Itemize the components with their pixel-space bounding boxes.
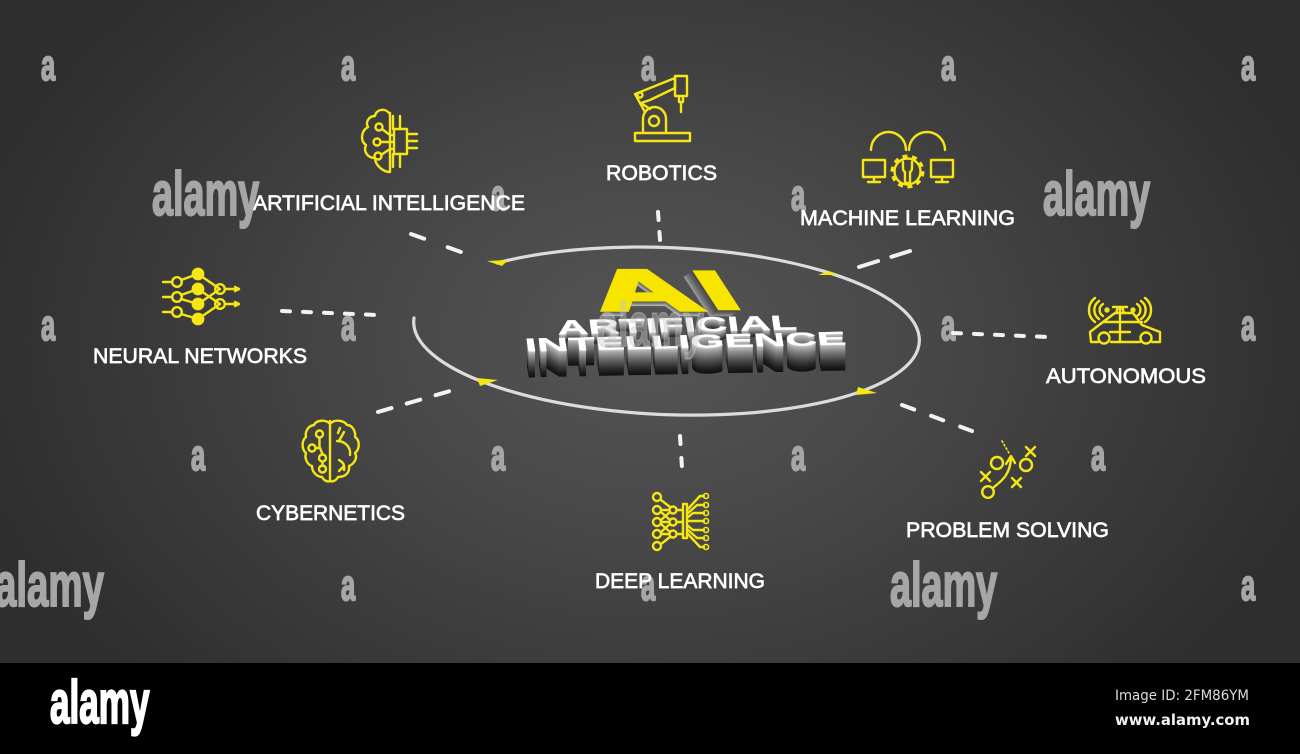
- watermarks: a: [941, 40, 956, 90]
- label: cybernetics: CYBERNETICS: [256, 502, 405, 525]
- watermarks: alamy: [1043, 159, 1151, 228]
- icon: brain chip: [362, 110, 417, 172]
- icon: robot arm: [635, 76, 690, 141]
- icon: deep learning network: [653, 493, 708, 550]
- watermarks: a: [341, 560, 356, 610]
- icon: problem solving playbook: [981, 441, 1035, 498]
- watermarks: a: [1241, 560, 1256, 610]
- 3D heading: INTELLIGENCE: INTELLIGENCE: [523, 328, 848, 355]
- watermarks: a: [191, 430, 206, 480]
- 3D heading: ARTIFICIAL: ARTIFICIAL: [555, 311, 799, 339]
- orbit arrowheads: [477, 260, 877, 395]
- label: problem solving: PROBLEM SOLVING: [906, 519, 1109, 542]
- label: machine learning: MACHINE LEARNING: [800, 207, 1015, 230]
- icon: machine learning network: [863, 132, 953, 187]
- label: artificial intelligence: ARTIFICIAL INTELLIGENCE: [253, 192, 525, 215]
- label: neural networks: NEURAL NETWORKS: [93, 345, 307, 368]
- watermarks: a: [641, 40, 656, 90]
- watermarks: a: [41, 40, 56, 90]
- watermarks: a: [1091, 430, 1106, 480]
- central orbit ring: [414, 247, 919, 415]
- watermarks: a: [341, 40, 356, 90]
- watermarks: a: [341, 300, 356, 350]
- watermarks: a: [791, 430, 806, 480]
- watermarks: a: [641, 560, 656, 610]
- watermarks: a: [491, 170, 506, 220]
- label: autonomous: AUTONOMOUS: [1046, 365, 1206, 388]
- label: deep learning: DEEP LEARNING: [595, 570, 765, 593]
- watermarks: [0, 40, 1256, 619]
- 3D heading: AI: A: [574, 258, 713, 323]
- watermarks: a: [1241, 300, 1256, 350]
- icon: autonomous car: [1089, 298, 1160, 344]
- watermarks: a: [941, 300, 956, 350]
- dashed connectors: [282, 212, 1048, 468]
- watermarks: a: [1241, 40, 1256, 90]
- icon: cybernetics brain: [303, 421, 359, 481]
- footer image id: Image ID: 2FM86YM: [1115, 688, 1249, 704]
- 3D heading: AI: I: [674, 258, 760, 323]
- center watermark: alamy: [597, 290, 705, 359]
- watermarks: alamy: [152, 159, 260, 228]
- footer url: www.alamy.com: [1115, 711, 1250, 729]
- label: robotics: ROBOTICS: [606, 162, 717, 185]
- watermarks: a: [491, 430, 506, 480]
- footer logo: alamy: [50, 671, 150, 736]
- watermarks: alamy: [890, 550, 998, 619]
- footer band: [0, 663, 1300, 754]
- icon: neural network: [163, 269, 239, 324]
- watermarks: a: [41, 300, 56, 350]
- watermarks: a: [791, 170, 806, 220]
